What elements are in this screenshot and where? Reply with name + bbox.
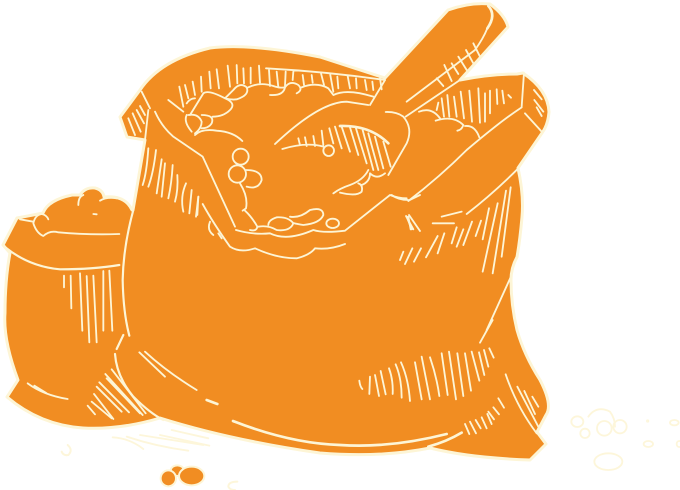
inner rim curve xyxy=(236,195,420,237)
grain bumps xyxy=(186,83,373,141)
handle crescent xyxy=(487,6,492,28)
sack left edge and inner fold xyxy=(145,110,235,227)
crease hatching xyxy=(88,369,146,419)
grain under flap xyxy=(419,110,479,137)
big sack lower right details xyxy=(233,320,680,470)
scoop thick lip xyxy=(340,126,388,143)
base lines xyxy=(139,352,240,423)
outer rim curve xyxy=(197,197,345,258)
sack mouth lower rim xyxy=(197,195,420,258)
small sack and big sack lower left xyxy=(7,195,240,490)
right body hatching xyxy=(400,168,518,330)
right flap hatching xyxy=(437,88,511,123)
belly hatching xyxy=(359,320,494,401)
left flap lines xyxy=(128,92,150,135)
large sack rim and grain details xyxy=(128,65,409,230)
bottom seam xyxy=(233,421,462,447)
corner lines xyxy=(506,374,538,433)
curl xyxy=(62,445,71,455)
scoop handle and right flap details xyxy=(370,6,543,201)
handle hatching xyxy=(437,43,480,86)
spilled grain outlines xyxy=(571,409,680,470)
scoop grain xyxy=(323,145,334,156)
handle lines xyxy=(370,28,487,117)
big sack edge xyxy=(115,210,163,420)
curl bottom xyxy=(228,482,237,490)
left fold hatching xyxy=(143,148,198,217)
small sack collar xyxy=(7,248,119,269)
sack silhouette xyxy=(3,4,549,460)
right flap edges xyxy=(408,73,543,201)
grain circles xyxy=(229,149,339,230)
rim notch xyxy=(392,195,408,200)
rim top hatching xyxy=(168,65,385,112)
seam stitches xyxy=(465,398,504,434)
scoop bowl xyxy=(275,102,409,194)
spilled beans xyxy=(161,465,204,486)
small sack rim xyxy=(20,195,119,236)
small sack hatching xyxy=(64,271,112,342)
ground strokes xyxy=(113,430,209,451)
